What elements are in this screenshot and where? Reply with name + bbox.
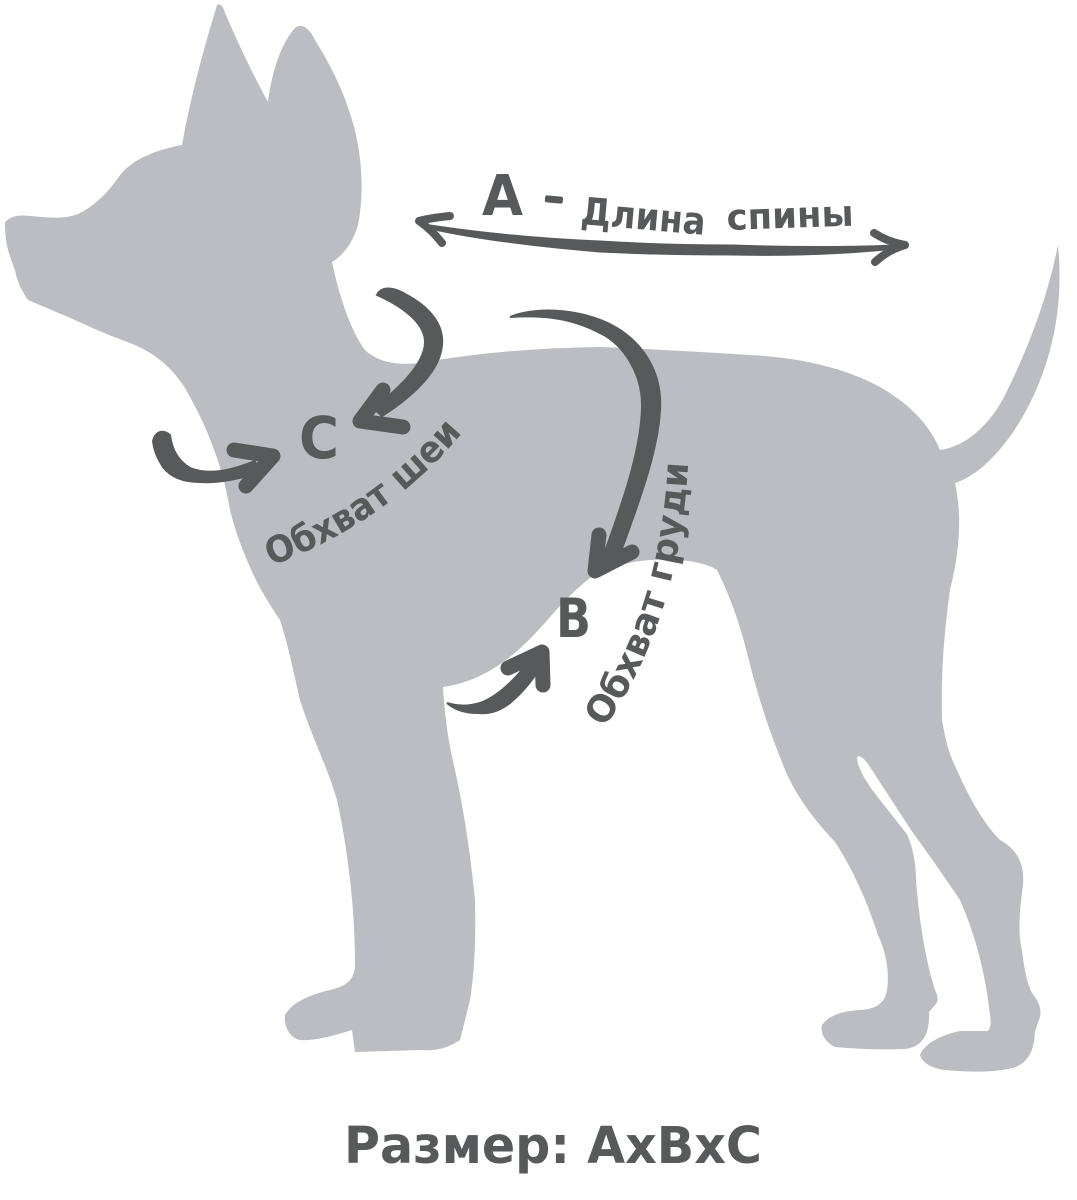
label: A - back length	[482, 164, 854, 244]
label: A - back length: А	[482, 164, 524, 229]
letter C: С	[299, 404, 339, 472]
label: A - back length: спины	[726, 194, 854, 239]
arrow A: back length	[419, 216, 905, 262]
label: chest girth: Обхват груди	[587, 464, 692, 722]
arrow B: from below	[447, 652, 543, 713]
arrow B: from top	[510, 311, 660, 571]
label: neck girth: Обхват шеи	[266, 422, 461, 562]
letter B: В	[556, 587, 591, 650]
arrow C: from top	[360, 288, 442, 427]
size formula caption: Размер: АхВхС	[344, 1117, 762, 1176]
label: A - back length: Длина	[579, 189, 708, 244]
arrow C: from left	[153, 432, 273, 486]
